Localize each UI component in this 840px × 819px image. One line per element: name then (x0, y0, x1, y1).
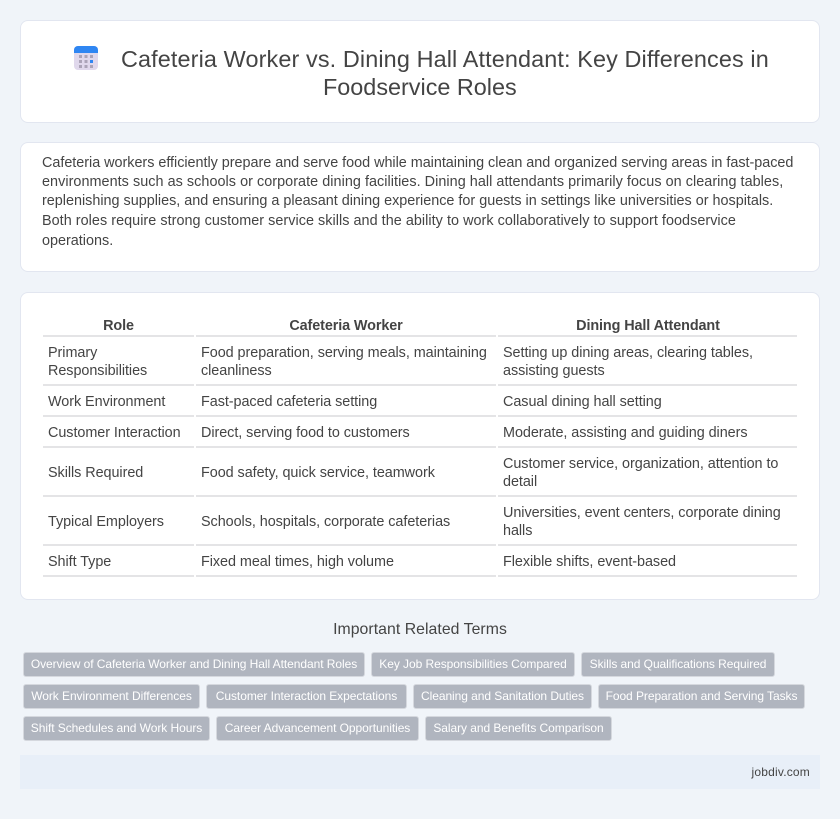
row: skills required (48, 456, 778, 490)
row: shift type: Fixed meal times, high volume (201, 554, 394, 570)
header card (20, 20, 820, 123)
row: primary responsibilities: Responsibilities (48, 363, 147, 379)
intro paragraph: operations. (42, 233, 113, 249)
related terms tags (23, 652, 805, 741)
title: Foodservice Roles (323, 74, 517, 100)
row: skills required: Customer service, organization, attention to (503, 456, 778, 472)
row: primary responsibilities (48, 345, 753, 379)
row: primary responsibilities: Primary (48, 345, 97, 361)
related terms tags: Skills and Qualifications Required (590, 657, 766, 671)
related terms heading: Important Related Terms (333, 621, 507, 638)
footer bar (20, 755, 820, 789)
table header (103, 318, 720, 334)
row: primary responsibilities: Food preparation, serving meals, maintaining (201, 345, 487, 361)
row: shift type: Flexible shifts, event-based (503, 554, 676, 570)
row: typical employers: Typical Employers (48, 514, 164, 530)
related terms tags: Work Environment Differences (31, 689, 192, 703)
row: work environment (48, 394, 662, 410)
related terms tags: Overview of Cafeteria Worker and Dining Hall Attendant Roles (31, 657, 357, 671)
related terms tags: Customer Interaction Expectations (216, 689, 397, 703)
intro paragraph: replenishing supplies, and ensuring a pleasant dining experience for guests in settings like universities or hospitals. (42, 193, 773, 209)
row: primary responsibilities: Setting up dining areas, clearing tables, (503, 345, 753, 361)
related terms tags: Career Advancement Opportunities (225, 721, 410, 735)
related terms tags: Salary and Benefits Comparison (433, 721, 604, 735)
title (121, 46, 769, 100)
row: customer interaction (48, 425, 748, 441)
row: shift type: Shift Type (48, 554, 111, 570)
table header: Role (103, 318, 134, 334)
related terms tags: Cleaning and Sanitation Duties (421, 689, 584, 703)
row: primary responsibilities: assisting guests (503, 363, 605, 379)
related terms tags: Shift Schedules and Work Hours (31, 721, 202, 735)
row: shift type (48, 554, 676, 570)
row: skills required: Skills Required (48, 465, 143, 481)
comparison table (43, 318, 797, 577)
footer source: jobdiv.com (752, 765, 810, 779)
intro paragraph: Cafeteria workers efficiently prepare and serve food while maintaining clean and organized serving areas in fast-paced (42, 155, 793, 171)
row: work environment: Work Environment (48, 394, 165, 410)
row: work environment: Casual dining hall setting (503, 394, 662, 410)
row: primary responsibilities: cleanliness (201, 363, 272, 379)
intro paragraph: Both roles require strong customer service skills and the ability to work collaboratively to support foodservice (42, 213, 736, 229)
row: customer interaction: Customer Interaction (48, 425, 181, 441)
table header: Cafeteria Worker (289, 318, 403, 334)
row: typical employers: Schools, hospitals, corporate cafeterias (201, 514, 450, 530)
row: work environment: Fast-paced cafeteria setting (201, 394, 377, 410)
row: customer interaction: Direct, serving food to customers (201, 425, 410, 441)
row: customer interaction: Moderate, assisting and guiding diners (503, 425, 748, 441)
table card (20, 292, 820, 600)
title: Cafeteria Worker vs. Dining Hall Attendant: Key Differences in (121, 46, 769, 72)
related terms tags: Key Job Responsibilities Compared (379, 657, 567, 671)
row: typical employers (48, 505, 781, 539)
intro paragraph (42, 155, 793, 249)
icon: calendar (74, 46, 98, 70)
intro paragraph: environments such as schools or corporate dining facilities. Dining hall attendants primarily focus on clearing tables, (42, 174, 783, 190)
related terms tags: Food Preparation and Serving Tasks (606, 689, 797, 703)
table header: Dining Hall Attendant (576, 318, 720, 334)
row: skills required: detail (503, 474, 537, 490)
row: typical employers: Universities, event centers, corporate dining (503, 505, 781, 521)
row: skills required: Food safety, quick service, teamwork (201, 465, 435, 481)
intro card (20, 142, 820, 272)
row: typical employers: halls (503, 523, 532, 539)
